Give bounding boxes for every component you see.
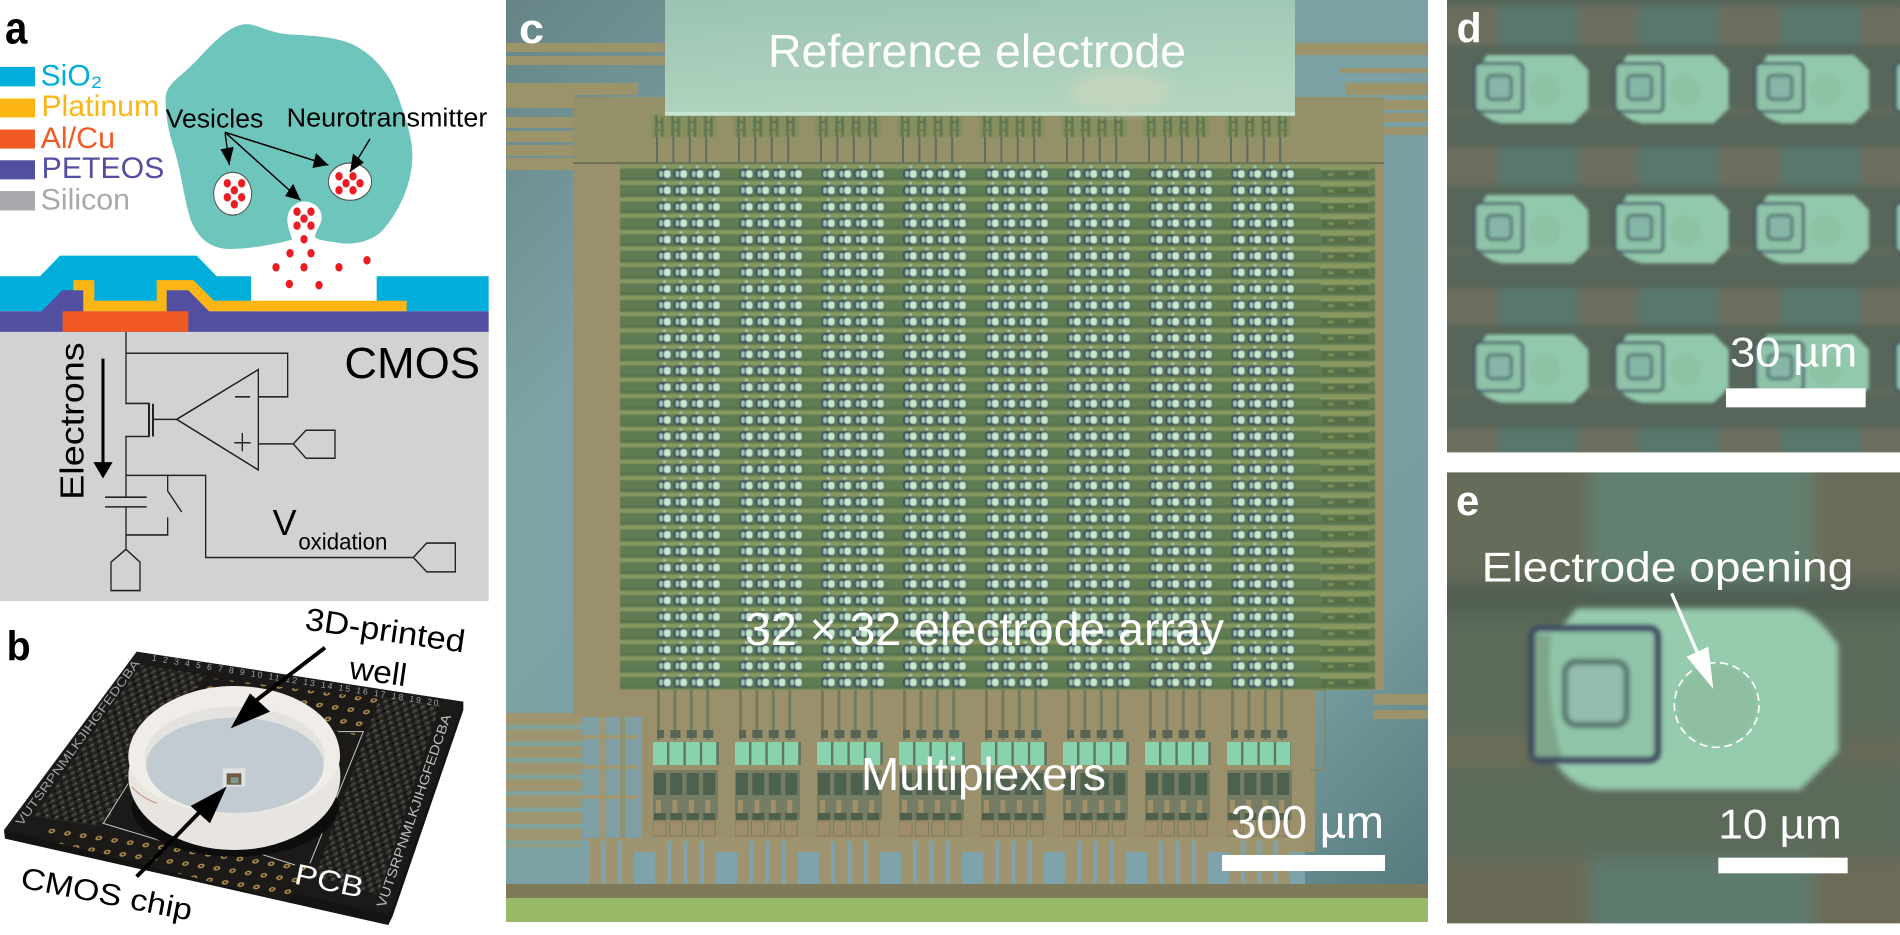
panel a: device cross-section and circuit xyxy=(0,3,489,601)
panel d: electrode array closeup xyxy=(1430,0,1900,460)
panel letter d: d xyxy=(1457,5,1482,52)
multiplexer channels xyxy=(657,690,1297,740)
label: CMOS: CMOS xyxy=(344,338,480,388)
reference electrode pad xyxy=(665,0,1295,116)
label: Neurotransmitter: Neurotransmitter xyxy=(287,104,487,133)
32 x 32 electrode array xyxy=(657,165,1297,690)
label: Electrons: Electrons xyxy=(53,342,91,500)
legend: layer materials: PETEOS xyxy=(42,151,164,185)
label: V oxidation: V xyxy=(273,504,297,544)
label: 3D-printed well xyxy=(303,601,467,693)
vesicle right xyxy=(328,163,372,200)
metal traces left and right xyxy=(506,43,1428,719)
label: 3D-printed well: 3D-printed xyxy=(303,601,467,660)
label: 3D-printed well: well xyxy=(346,649,409,693)
scale bar 300 um: 300 µm xyxy=(1231,796,1384,848)
arrows to vesicles and neurotransmitter xyxy=(225,132,370,200)
array background rows xyxy=(620,164,1375,690)
PCB edge labels: VUTSRPNMLKJIHGFEDCBA xyxy=(13,657,143,828)
panel e: single electrode closeup xyxy=(1447,472,1900,924)
silicon CMOS substrate xyxy=(0,332,489,601)
Al/Cu metal xyxy=(63,311,188,332)
legend: layer materials: Silicon xyxy=(41,182,130,216)
right side row logic xyxy=(1320,165,1370,690)
arrow: to well xyxy=(231,648,325,728)
PCB edge labels: 1 2 3 4 5 6 7 8 9 10 11 12 13 14 15 16 17 18 19 20 xyxy=(151,653,440,708)
output traces xyxy=(585,838,1305,885)
label: Multiplexers: Multiplexers xyxy=(861,748,1106,800)
bottom bus bar xyxy=(506,884,1428,898)
panel letter e: e xyxy=(1456,477,1479,524)
multiplexer mint pads xyxy=(651,742,1291,765)
readout circuit schematic xyxy=(105,332,455,591)
panel letter c: c xyxy=(519,5,544,52)
scale bar 30 um xyxy=(1726,329,1866,407)
label: Electrode opening: Electrode opening xyxy=(1482,544,1853,591)
PCB edge labels xyxy=(13,653,454,909)
vesicle left xyxy=(214,172,252,215)
tan periphery surrounding array xyxy=(573,97,1384,852)
micrograph background xyxy=(1447,472,1900,924)
label: Vesicles: Vesicles xyxy=(166,105,263,134)
legend: layer materials: SiO₂ xyxy=(41,59,102,92)
micrograph background xyxy=(1430,0,1900,460)
label: Reference electrode: Reference electrode xyxy=(768,25,1186,77)
label: 32 x 32 electrode array: 32 × 32 electrode array xyxy=(745,603,1224,655)
PCB edge labels: VUTSRPNMLKJIHGFEDCBA xyxy=(374,712,454,909)
neuron cell body xyxy=(166,24,412,249)
multiplexer output tiles xyxy=(652,820,1292,837)
label: V oxidation xyxy=(273,504,387,555)
arrow: electrode opening xyxy=(1672,593,1713,689)
label: V oxidation: oxidation xyxy=(298,528,387,555)
electrode pad xyxy=(1553,608,1838,790)
arrow: to chip xyxy=(137,787,227,877)
neurotransmitter dots xyxy=(224,172,371,289)
label: PCB: PCB xyxy=(292,858,367,905)
legend: layer materials: Al/Cu xyxy=(41,121,115,154)
legend: layer materials xyxy=(0,59,164,216)
panel c: micrograph of chip xyxy=(506,0,1428,922)
scale bar 10 um: 10 µm xyxy=(1718,800,1842,847)
PETEOS layer xyxy=(0,290,489,332)
vesicle fusing with membrane xyxy=(287,202,322,249)
arrow: electron flow xyxy=(93,359,113,479)
panel letter b: b xyxy=(7,623,31,670)
scale bar 300 um xyxy=(1222,806,1385,871)
SiO2 passivation layer xyxy=(0,256,489,311)
multiplexer transistor blocks xyxy=(652,770,1292,820)
electrode grid xyxy=(1475,55,1900,403)
3D-printed well xyxy=(128,686,340,850)
contact strips below xyxy=(506,713,582,847)
panel b: photo of PCB with 3D-printed well xyxy=(4,601,467,927)
PCB board xyxy=(4,652,463,925)
via square xyxy=(1532,628,1757,760)
vertical leads above array xyxy=(656,137,1296,163)
scale bar 10 um xyxy=(1718,800,1848,873)
row driver forks along top xyxy=(651,115,1291,137)
chip background xyxy=(506,0,1428,922)
platinum electrode xyxy=(73,280,407,311)
dashed electrode opening xyxy=(1674,663,1759,747)
bottom green band xyxy=(506,898,1428,922)
panel letter a: a xyxy=(5,3,28,53)
label: CMOS chip: CMOS chip xyxy=(18,862,195,927)
legend: layer materials: Platinum xyxy=(41,89,159,122)
scale bar 30 um: 30 µm xyxy=(1730,329,1857,376)
